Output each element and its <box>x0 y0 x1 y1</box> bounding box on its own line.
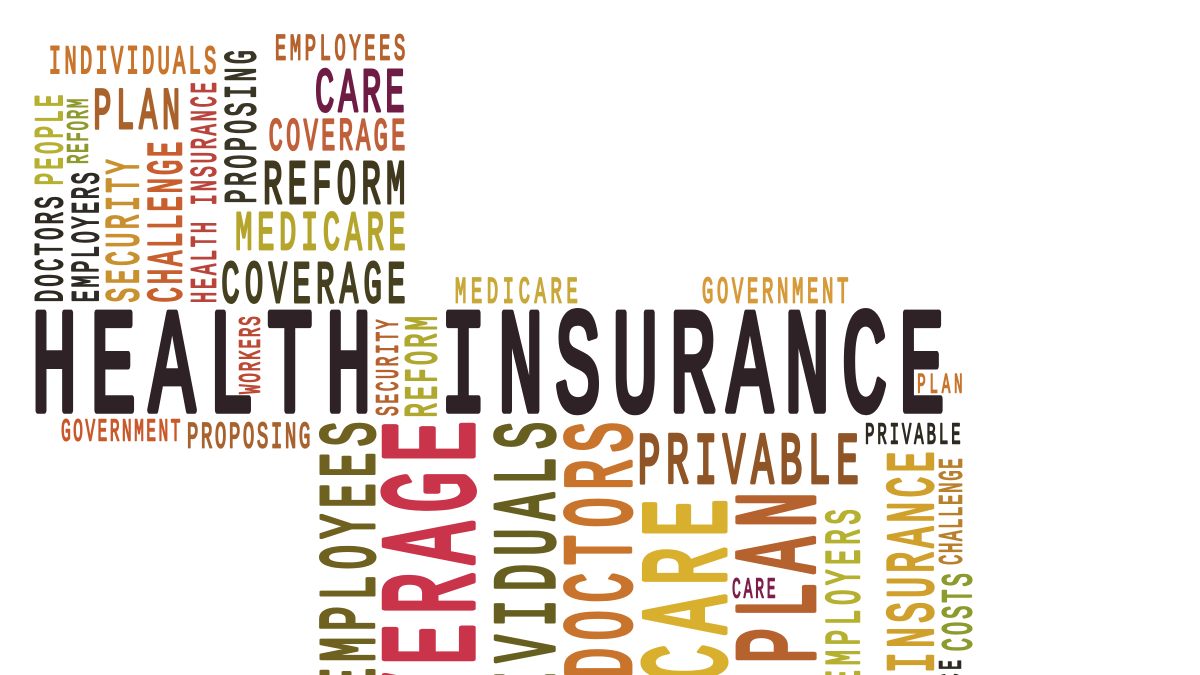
word: MEDICARE small: MEDICARE <box>455 272 582 314</box>
vertical word: INSURANCE gold: INSURANCE <box>877 447 953 673</box>
word: PROPOSING: PROPOSING <box>187 417 313 459</box>
word: COVERAGE: COVERAGE <box>269 112 409 163</box>
vertical word: DOCTORS: DOCTORS <box>31 193 75 302</box>
vertical word: PEOPLE: PEOPLE <box>31 91 75 185</box>
word: GOVERNMENT left: GOVERNMENT <box>61 414 183 450</box>
word: MEDICARE: MEDICARE <box>235 205 410 266</box>
word: INSURANCE: INSURANCE <box>440 288 956 455</box>
vertical word: PLAN large: PLAN <box>720 482 849 664</box>
vertical word: WORKERS: WORKERS <box>236 314 269 394</box>
vertical word: REFORM olive: REFORM <box>398 313 450 417</box>
word: CARE: CARE <box>315 59 409 130</box>
word: GOVERNMENT: GOVERNMENT <box>702 272 852 314</box>
vertical word: COSTS: COSTS <box>937 570 985 651</box>
word: INDIVIDUALS: INDIVIDUALS <box>49 42 220 86</box>
word: PLAN: PLAN <box>93 80 185 145</box>
word: REFORM: REFORM <box>263 151 411 222</box>
vertical word: CHALLENGE: CHALLENGE <box>140 139 196 302</box>
word: PRIVABLE small: PRIVABLE <box>865 420 963 453</box>
word: CARE small: CARE <box>732 574 778 606</box>
word: PRIVABLE: PRIVABLE <box>638 424 865 505</box>
vertical word: SECURITY small: SECURITY <box>371 317 407 416</box>
vertical word: REFORM: REFORM <box>64 97 97 164</box>
vertical word: CHALLENGE small: CHALLENGE <box>934 457 971 565</box>
vertical word: DOCTORS large: DOCTORS <box>551 415 660 675</box>
vertical word: HEALTH INSURANCE: HEALTH INSURANCE <box>185 79 227 303</box>
word: COVERAGE dark: COVERAGE <box>221 254 411 321</box>
vertical word: PROPOSING: PROPOSING <box>217 47 269 203</box>
vertical word: EMPLOYERS: EMPLOYERS <box>67 170 111 302</box>
vertical word: SECURITY: SECURITY <box>100 156 153 302</box>
word: PLAN small: PLAN <box>917 370 966 401</box>
word: HEALTH: HEALTH <box>31 288 385 455</box>
word: EMPLOYEES: EMPLOYEES <box>275 29 409 71</box>
